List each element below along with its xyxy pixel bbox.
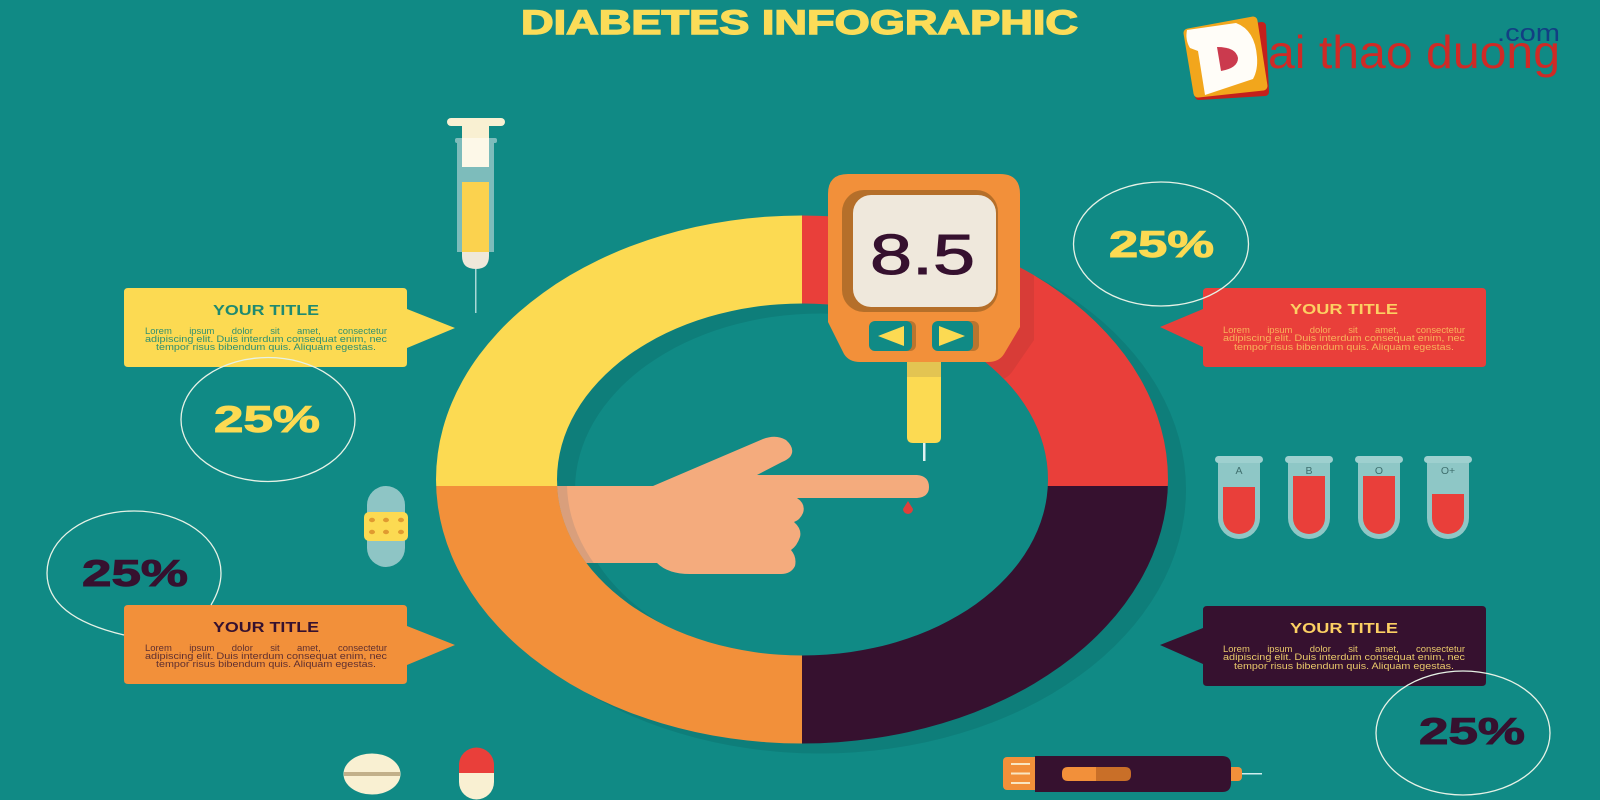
inner ring shadow <box>557 304 828 620</box>
meter screen: 8.5 <box>870 223 975 287</box>
left button <box>869 321 916 351</box>
body text: tempor risus bibendum quis. Aliquam egestas. <box>1234 342 1454 352</box>
body text <box>145 326 388 352</box>
stat: 25% bottom right: 25% <box>1419 711 1525 752</box>
stat: 25% bottom right <box>1376 671 1550 795</box>
body text: Lorem ipsum dolor sit amet, consectetur <box>145 643 387 653</box>
tube A: A <box>1235 465 1243 477</box>
body text <box>1223 325 1466 352</box>
right button <box>932 321 979 351</box>
tube O+ <box>1424 456 1472 539</box>
body text: adipiscing elit. Duis interdum consequat enim, nec <box>1223 333 1466 343</box>
hole of donut <box>557 304 1048 656</box>
tube O: O <box>1375 465 1383 477</box>
callout: dark purple: YOUR TITLE <box>1290 620 1398 637</box>
tube A <box>1215 456 1263 539</box>
stat: 25% top right: 25% <box>1109 224 1214 265</box>
meter screen <box>842 190 998 312</box>
blood drop <box>903 501 913 514</box>
icon: capsule <box>459 748 494 800</box>
tube O <box>1355 456 1403 539</box>
tube O+: O+ <box>1441 465 1455 477</box>
callout: red: YOUR TITLE <box>1290 301 1398 318</box>
logo: dai thao duong <box>1186 20 1560 96</box>
callout: orange: YOUR TITLE <box>213 619 319 636</box>
body text <box>145 643 388 669</box>
tube B: B <box>1305 465 1313 477</box>
title: DIABETES INFOGRAPHIC <box>521 4 1078 42</box>
icon: insulin pen <box>1003 756 1262 792</box>
stat: 25% bottom left <box>47 511 221 635</box>
blood glucose meter <box>828 174 1020 461</box>
body text: tempor risus bibendum quis. Aliquam egestas. <box>156 342 376 352</box>
test strip <box>907 362 941 461</box>
segment: dark purple <box>802 486 1174 756</box>
icon: syringe <box>447 118 505 313</box>
body text: Lorem ipsum dolor sit amet, consectetur <box>145 326 387 336</box>
callout: yellow: YOUR TITLE <box>213 302 319 319</box>
body text: adipiscing elit. Duis interdum consequat enim, nec <box>145 651 388 661</box>
callout: red <box>1160 288 1486 367</box>
body text: adipiscing elit. Duis interdum consequat enim, nec <box>1223 652 1466 662</box>
body text: adipiscing elit. Duis interdum consequat enim, nec <box>145 334 388 344</box>
callout: dark purple <box>1160 606 1486 686</box>
body text: Lorem ipsum dolor sit amet, consectetur <box>1223 644 1465 654</box>
tube B <box>1285 456 1333 539</box>
donut chart <box>430 194 1174 756</box>
donut chart shadow <box>454 226 1186 754</box>
callout: yellow <box>124 288 455 367</box>
callout: orange <box>124 605 455 684</box>
pointing hand <box>557 436 929 574</box>
logo: dai thao duong: ai thao duong <box>1268 26 1560 78</box>
icon: bandage <box>364 486 408 567</box>
stat: 25% top right <box>1074 182 1248 306</box>
segment: yellow <box>430 205 802 486</box>
body text: Lorem ipsum dolor sit amet, consectetur <box>1223 325 1465 335</box>
segment: orange <box>430 486 802 756</box>
stat: 25% left <box>181 358 355 482</box>
stat: 25% bottom left: 25% <box>82 553 188 594</box>
logo: dai thao duong: .com <box>1497 20 1560 47</box>
body text: tempor risus bibendum quis. Aliquam egestas. <box>1234 661 1454 671</box>
body text: tempor risus bibendum quis. Aliquam egestas. <box>156 659 376 669</box>
body text <box>1223 644 1466 671</box>
meter body <box>828 174 1020 362</box>
blood test tubes <box>1215 456 1472 539</box>
segment: red <box>802 205 1174 486</box>
icon: round pill <box>344 754 400 794</box>
meter shadow on red segment <box>986 268 1034 379</box>
stat: 25% left: 25% <box>214 399 320 440</box>
